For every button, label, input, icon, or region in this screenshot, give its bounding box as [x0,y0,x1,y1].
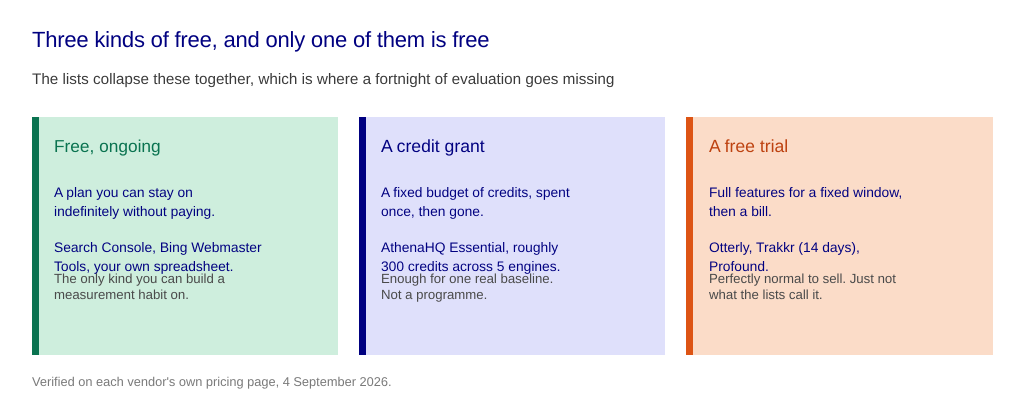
note text: Perfectly normal to sell. Just not [709,271,896,286]
heading: free trial: A free trial [709,136,788,156]
note text: what the lists call it. [709,287,823,302]
subtitle: The lists collapse these together, which is where a fortnight of evaluation goes missing [32,71,614,88]
footnote: Verified on each vendor's own pricing page, 4 September 2026. [32,374,392,389]
note text [54,271,225,302]
note text: The only kind you can build a [54,271,225,286]
definition text: A plan you can stay on [54,185,193,200]
note text: Enough for one real baseline. [381,271,553,286]
examples text: Otterly, Trakkr (14 days), [709,240,860,255]
heading: free, ongoing: Free, ongoing [54,136,161,156]
panel: credit grant [359,117,665,355]
definition text: A fixed budget of credits, spent [381,185,570,200]
title: Three kinds of free, and only one of them is free [32,27,489,52]
panel: free, ongoing [32,117,338,355]
heading: credit grant: A credit grant [381,136,485,156]
definition text: once, then gone. [381,204,484,219]
definition text: then a bill. [709,204,772,219]
note text: measurement habit on. [54,287,189,302]
note text: Not a programme. [381,287,487,302]
definition text [709,185,902,219]
examples text: AthenaHQ Essential, roughly [381,240,558,255]
note text [381,271,553,302]
examples text: Tools, your own spreadsheet. [54,259,233,274]
definition text [54,185,215,219]
note text [709,271,896,302]
examples text [709,240,860,274]
definition text: indefinitely without paying. [54,204,215,219]
panel: free trial [686,117,993,355]
examples text: Profound. [709,259,769,274]
examples text [381,240,560,274]
examples text: 300 credits across 5 engines. [381,259,560,274]
definition text [381,185,570,219]
examples text: Search Console, Bing Webmaster [54,240,262,255]
definition text: Full features for a fixed window, [709,185,902,200]
examples text [54,240,262,274]
